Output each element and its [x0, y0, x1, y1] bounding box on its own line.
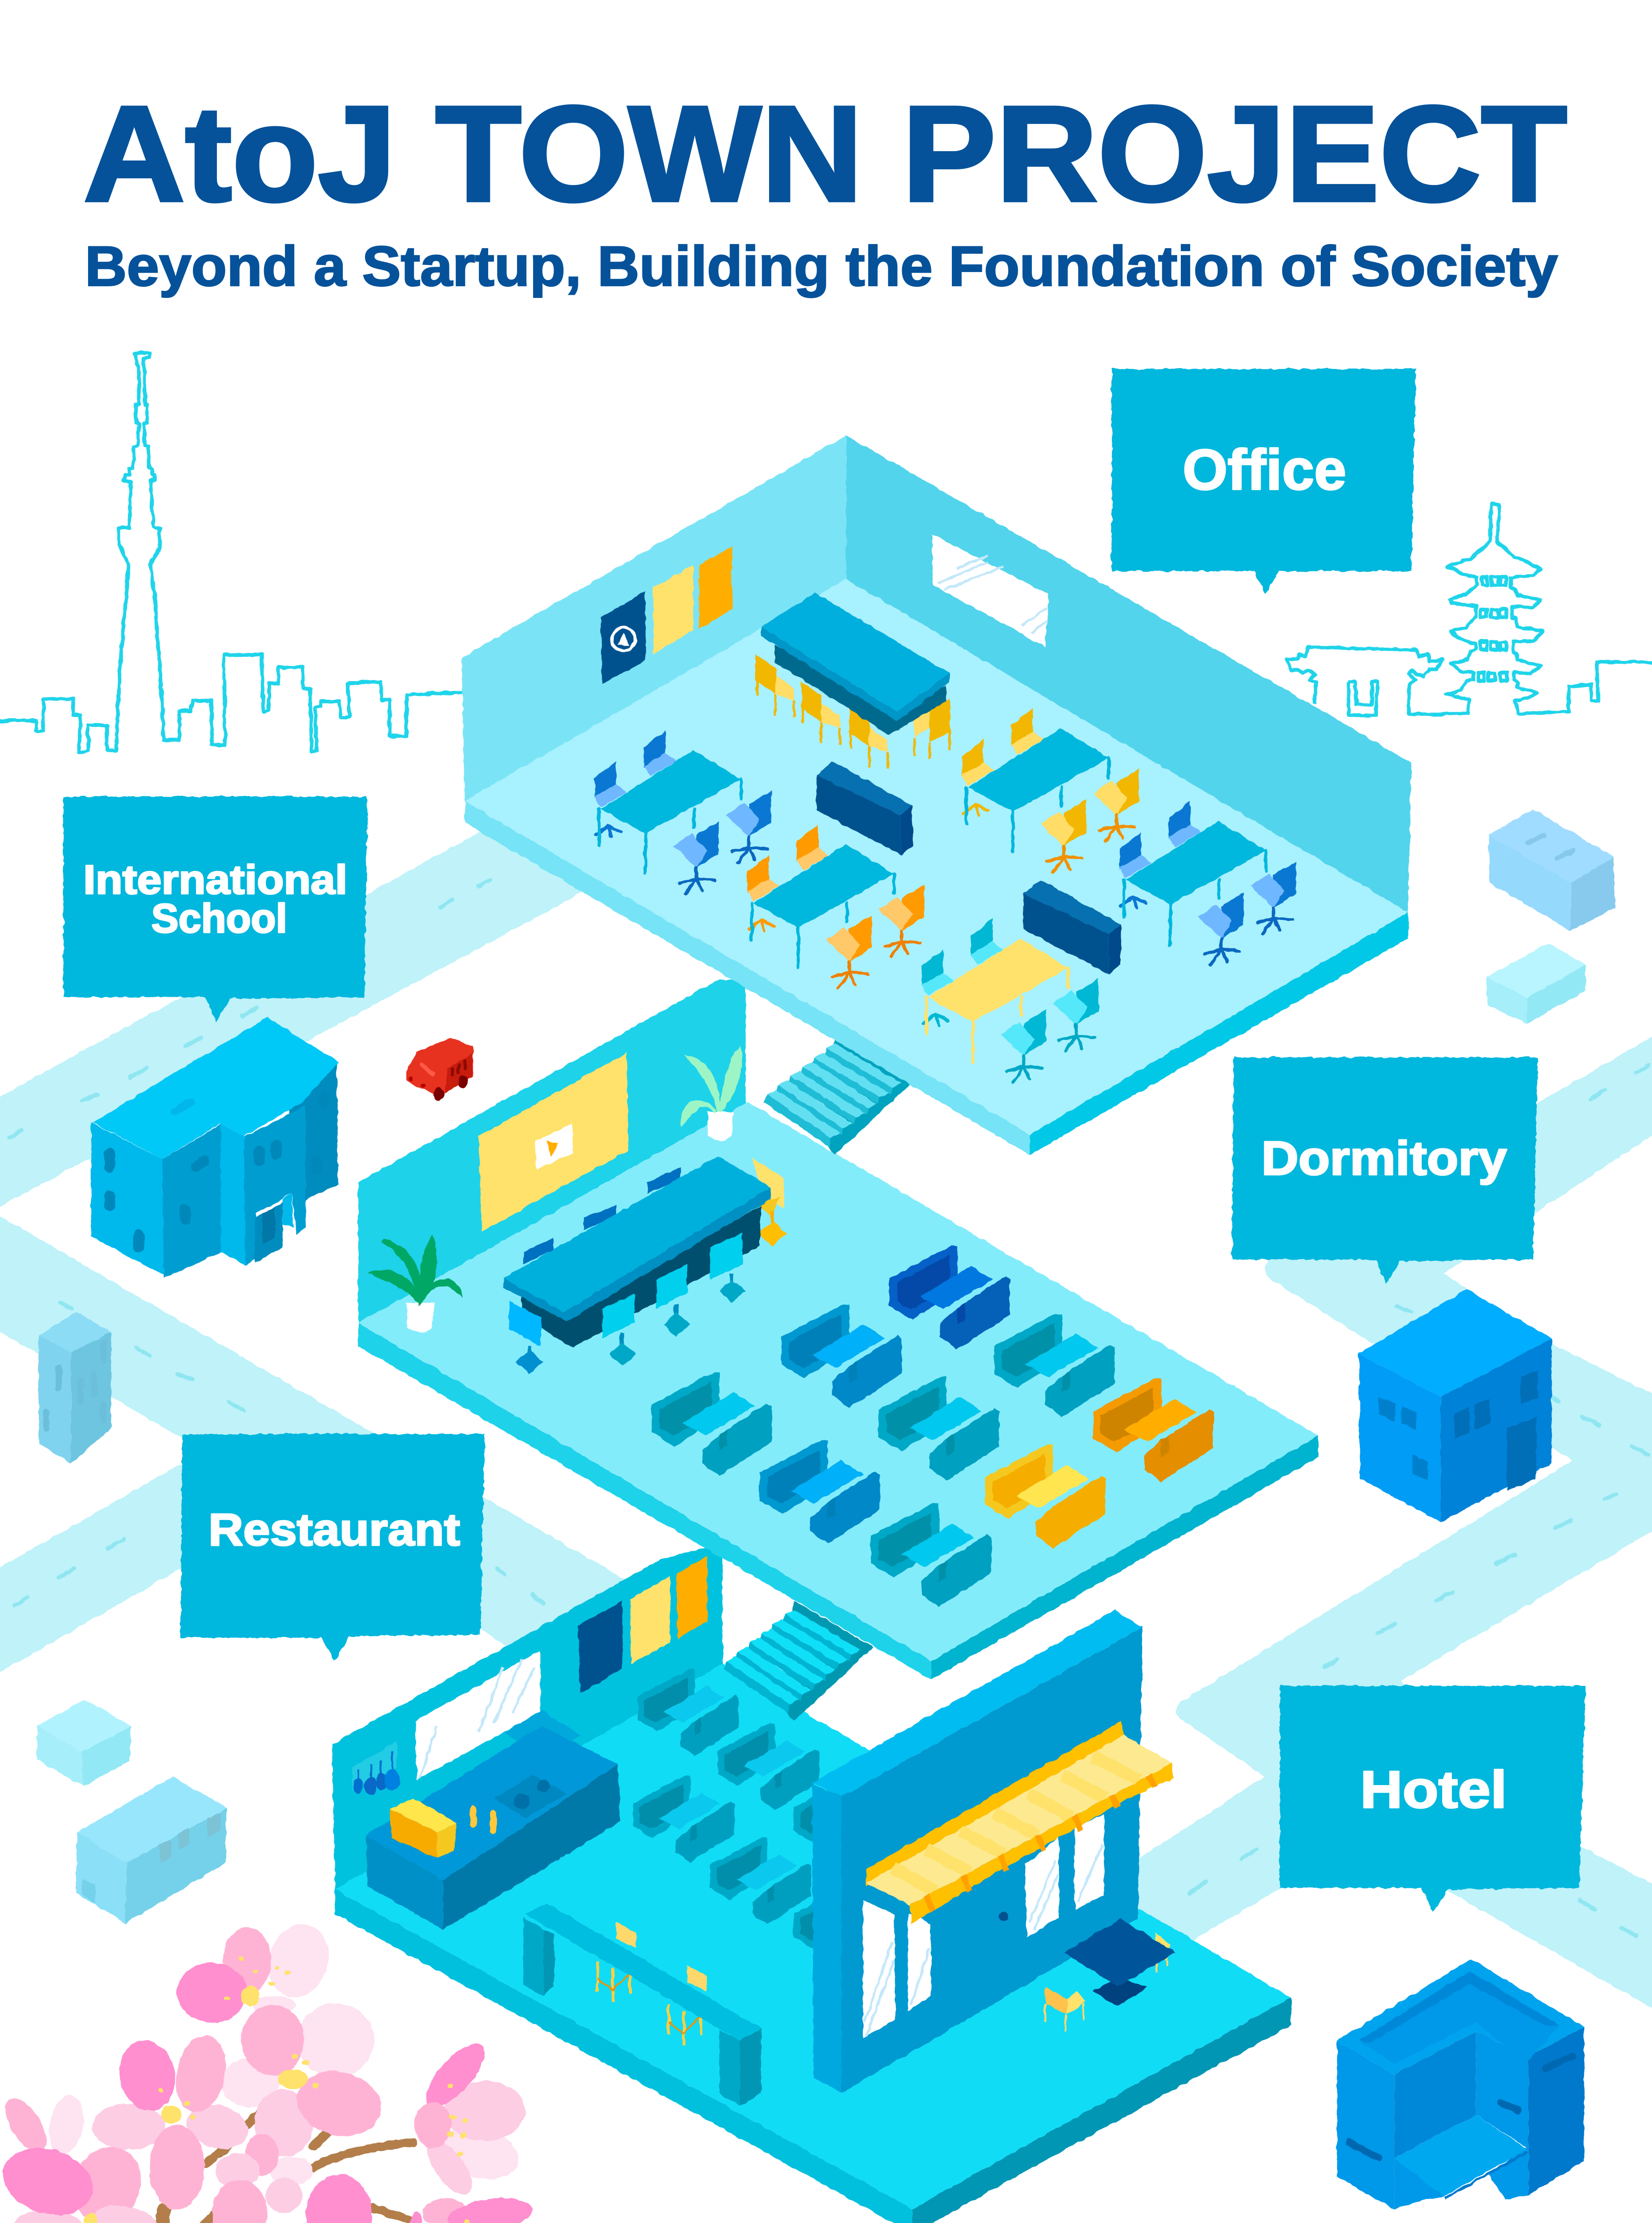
road: upper left	[0, 803, 649, 1215]
desk set orange	[747, 824, 924, 988]
International School label: School	[151, 896, 287, 941]
yellow chair at table end	[752, 1158, 787, 1246]
cherry blossom branch	[0, 1918, 534, 2223]
building: International School	[91, 1017, 338, 1278]
Restaurant label: Restaurant	[209, 1504, 460, 1555]
bar counter and stools	[523, 1903, 761, 2106]
blossom: top	[177, 1918, 337, 2022]
high table back chairs	[523, 1167, 681, 1264]
shop windows	[863, 1814, 1104, 2038]
meeting table and chairs	[755, 593, 950, 770]
blossom: left upper	[92, 2031, 253, 2210]
plant: light green	[682, 1050, 740, 1141]
red bus	[406, 1037, 473, 1101]
restaurant wall panels	[577, 1556, 707, 1693]
blossom: middle right	[277, 2175, 406, 2223]
Dormitory label: Dormitory	[1261, 1132, 1507, 1185]
blossom: right upper	[415, 2035, 525, 2201]
office window	[933, 534, 1048, 647]
lounge booths	[652, 1246, 1214, 1607]
desk set blue	[594, 730, 771, 894]
stairs: restaurant to lounge	[723, 1601, 873, 1721]
background building: top right block	[1488, 809, 1615, 931]
floor: restaurant	[332, 1544, 1291, 2223]
subtitle: Beyond a Startup, Building the Foundation of Society	[85, 234, 1558, 297]
road lane markings	[9, 880, 1649, 1936]
lounge floor surface	[358, 1102, 1319, 1661]
plant: dark green	[372, 1238, 460, 1332]
high table	[503, 1156, 770, 1348]
office wall panels	[601, 546, 732, 684]
blossom: centre bud	[212, 2134, 313, 2223]
partition 1	[817, 761, 912, 855]
background building: left tall tower	[39, 1312, 111, 1463]
office slab	[465, 801, 1030, 1155]
kitchen counter	[366, 1710, 621, 1930]
road: right junction network	[1065, 1028, 1652, 2018]
callout: International School	[63, 797, 368, 1022]
Office label: Office	[1183, 438, 1346, 502]
blossom: centre upper	[221, 2003, 389, 2157]
roads network	[0, 803, 1652, 2018]
title: AtoJ TOWN PROJECT	[84, 77, 1567, 229]
stairs: lounge to office	[764, 1034, 914, 1155]
lounge slab	[358, 1323, 931, 1679]
desk set blue right	[1119, 801, 1296, 965]
cash register	[389, 1798, 493, 1858]
restaurant floor surface	[335, 1664, 1291, 2209]
Dormitory bubble shape	[1232, 1057, 1538, 1284]
restaurant wall	[332, 1544, 722, 1894]
blossom: far left middle	[0, 2092, 159, 2223]
blossom: right lower	[407, 2194, 534, 2223]
International School label: International	[84, 857, 347, 903]
partition 2	[1024, 880, 1121, 974]
Office bubble shape	[1111, 369, 1416, 594]
callout: Restaurant	[180, 1434, 485, 1661]
Restaurant bubble shape	[180, 1434, 485, 1661]
office back walls	[461, 435, 846, 806]
background building: small pale cube	[37, 1700, 131, 1786]
lounge wall	[358, 979, 746, 1328]
callout: Dormitory	[1232, 1057, 1538, 1284]
desk set yellow	[962, 709, 1139, 872]
background building: flat pale block	[1487, 943, 1586, 1023]
background building: lower left block	[76, 1777, 227, 1923]
skyline: Tokyo tower and buildings	[0, 353, 465, 753]
Hotel bubble shape	[1280, 1685, 1586, 1913]
awning	[866, 1721, 1173, 1923]
projector screen	[479, 1053, 628, 1232]
building: Hotel	[1337, 1959, 1584, 2209]
branches	[16, 2111, 417, 2223]
restaurant window	[415, 1650, 541, 1780]
building: Dormitory	[1359, 1289, 1552, 1522]
Hotel label: Hotel	[1360, 1761, 1507, 1819]
callout: Office	[1111, 369, 1416, 594]
floor: office	[461, 435, 1411, 1155]
International School bubble shape	[63, 797, 368, 1022]
shop front wall	[812, 1610, 1143, 2093]
cafe table and chairs	[1045, 1919, 1175, 2031]
office floor surface	[465, 579, 1408, 1135]
callout: Hotel	[1280, 1685, 1586, 1913]
hanging pans	[352, 1741, 400, 1795]
restaurant booths	[633, 1669, 895, 1974]
road: lower left junction	[0, 1207, 649, 1690]
floor: lounge	[358, 979, 1319, 1679]
restaurant slab	[335, 1890, 912, 2223]
high table stools	[509, 1233, 746, 1374]
skyline: temple gate and pagoda	[1286, 503, 1652, 715]
desk set teal with yellow top	[922, 919, 1099, 1082]
